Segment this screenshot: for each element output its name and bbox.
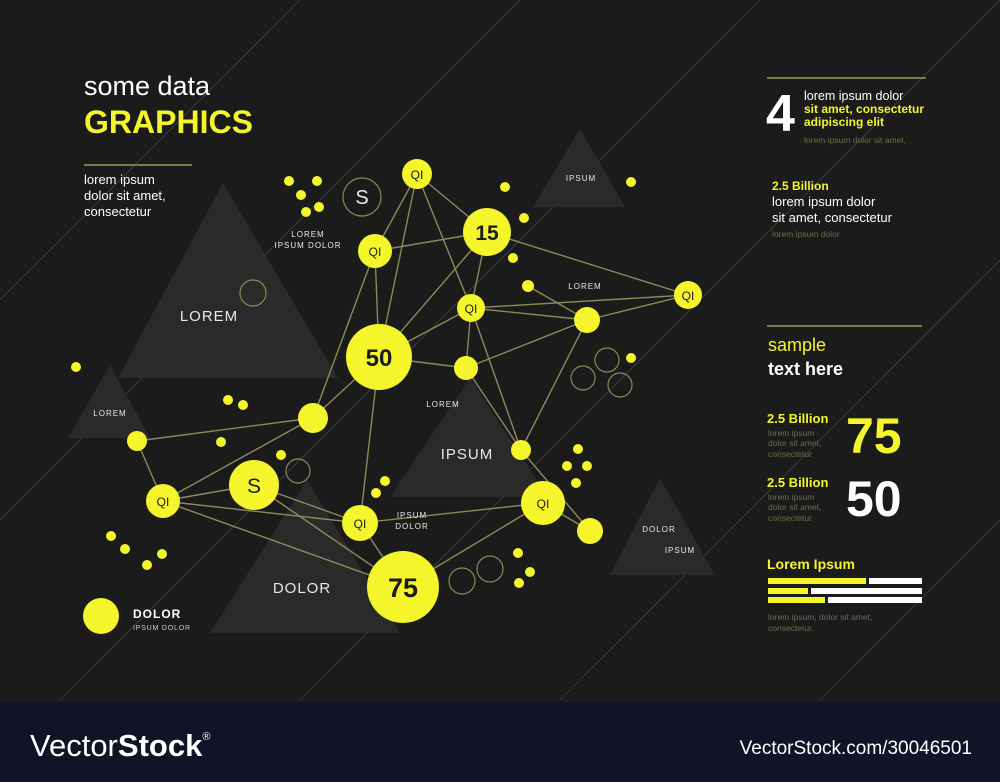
right stats top: sit amet, consectetur xyxy=(804,102,924,116)
right stats top: 2.5 Billion xyxy=(772,179,829,193)
right stats top: lorem ipsum dolor xyxy=(772,194,876,209)
right stats bottom: 2.5 Billion xyxy=(767,411,828,426)
node labels: QI xyxy=(682,289,694,303)
footer bar xyxy=(0,702,1000,782)
outline circles xyxy=(240,178,632,594)
right stats bottom: consectetur. xyxy=(768,623,814,633)
right stats top: lorem ipsum dolor xyxy=(804,89,903,103)
legend: DOLOR xyxy=(133,607,181,621)
node labels: 75 xyxy=(388,573,418,603)
right stats bottom: Lorem Ipsum xyxy=(767,556,855,572)
title: lorem ipsum xyxy=(84,172,155,187)
right stats bottom: dolor sit amet, xyxy=(768,438,821,448)
area labels: IPSUM xyxy=(441,446,493,463)
right stats bottom: sample xyxy=(768,335,826,355)
node labels: QI xyxy=(465,302,477,316)
node labels: QI xyxy=(537,497,549,511)
node labels: QI xyxy=(354,517,366,531)
legend xyxy=(83,598,191,634)
footer bar: VectorStock.com/30046501 xyxy=(740,738,972,759)
background triangles xyxy=(68,129,715,633)
area labels: LOREM xyxy=(291,230,325,239)
node labels: S xyxy=(247,475,261,498)
area labels: IPSUM xyxy=(665,546,695,555)
area labels: LOREM xyxy=(426,400,460,409)
right stats bottom: lorem ipsum, dolor sit amet, xyxy=(768,612,872,622)
right stats bottom: consectetur xyxy=(768,449,812,459)
node labels: 50 xyxy=(366,345,392,372)
legend: IPSUM DOLOR xyxy=(133,625,191,632)
title: dolor sit amet, xyxy=(84,188,166,203)
node labels xyxy=(157,168,694,603)
right stats top xyxy=(766,77,926,239)
node labels: QI xyxy=(411,168,423,182)
right stats bottom: consectetur xyxy=(768,513,812,523)
network edges xyxy=(137,174,688,587)
area labels: S xyxy=(355,187,369,209)
right stats top: lorem ipsum dolor xyxy=(772,229,840,239)
node labels: 15 xyxy=(475,222,499,245)
area labels: LOREM xyxy=(93,409,127,418)
right stats bottom: dolor sit amet, xyxy=(768,502,821,512)
node labels: QI xyxy=(369,245,381,259)
right stats bottom xyxy=(767,325,922,633)
area labels xyxy=(93,174,695,597)
right stats bottom: lorem ipsum xyxy=(768,492,814,502)
footer bar: ® xyxy=(202,731,210,743)
area labels: LOREM xyxy=(568,282,602,291)
title: consectetur xyxy=(84,204,152,219)
area labels: IPSUM DOLOR xyxy=(274,241,342,250)
title xyxy=(84,71,253,219)
right stats bottom: 2.5 Billion xyxy=(767,475,828,490)
title: GRAPHICS xyxy=(84,104,253,140)
small dots xyxy=(71,176,636,588)
area labels: IPSUM xyxy=(566,174,596,183)
footer bar: VectorStock xyxy=(30,728,202,763)
title: some data xyxy=(84,71,211,101)
area labels: IPSUM xyxy=(397,511,427,520)
right stats top: adipiscing elit xyxy=(804,115,884,129)
right stats top: sit amet, consectetur xyxy=(772,210,893,225)
area labels: LOREM xyxy=(180,308,238,325)
right stats bottom: 75 xyxy=(846,408,902,464)
area labels: DOLOR xyxy=(395,522,429,531)
right stats bottom: text here xyxy=(768,359,843,379)
right stats top: 4 xyxy=(766,85,795,143)
area labels: DOLOR xyxy=(642,525,676,534)
right stats bottom: lorem ipsum xyxy=(768,428,814,438)
network nodes xyxy=(127,159,702,623)
area labels: DOLOR xyxy=(273,580,331,597)
node labels: QI xyxy=(157,495,169,509)
right stats top: lorem ipsum dolor sit amet, xyxy=(804,135,906,145)
right stats bottom: 50 xyxy=(846,471,902,527)
